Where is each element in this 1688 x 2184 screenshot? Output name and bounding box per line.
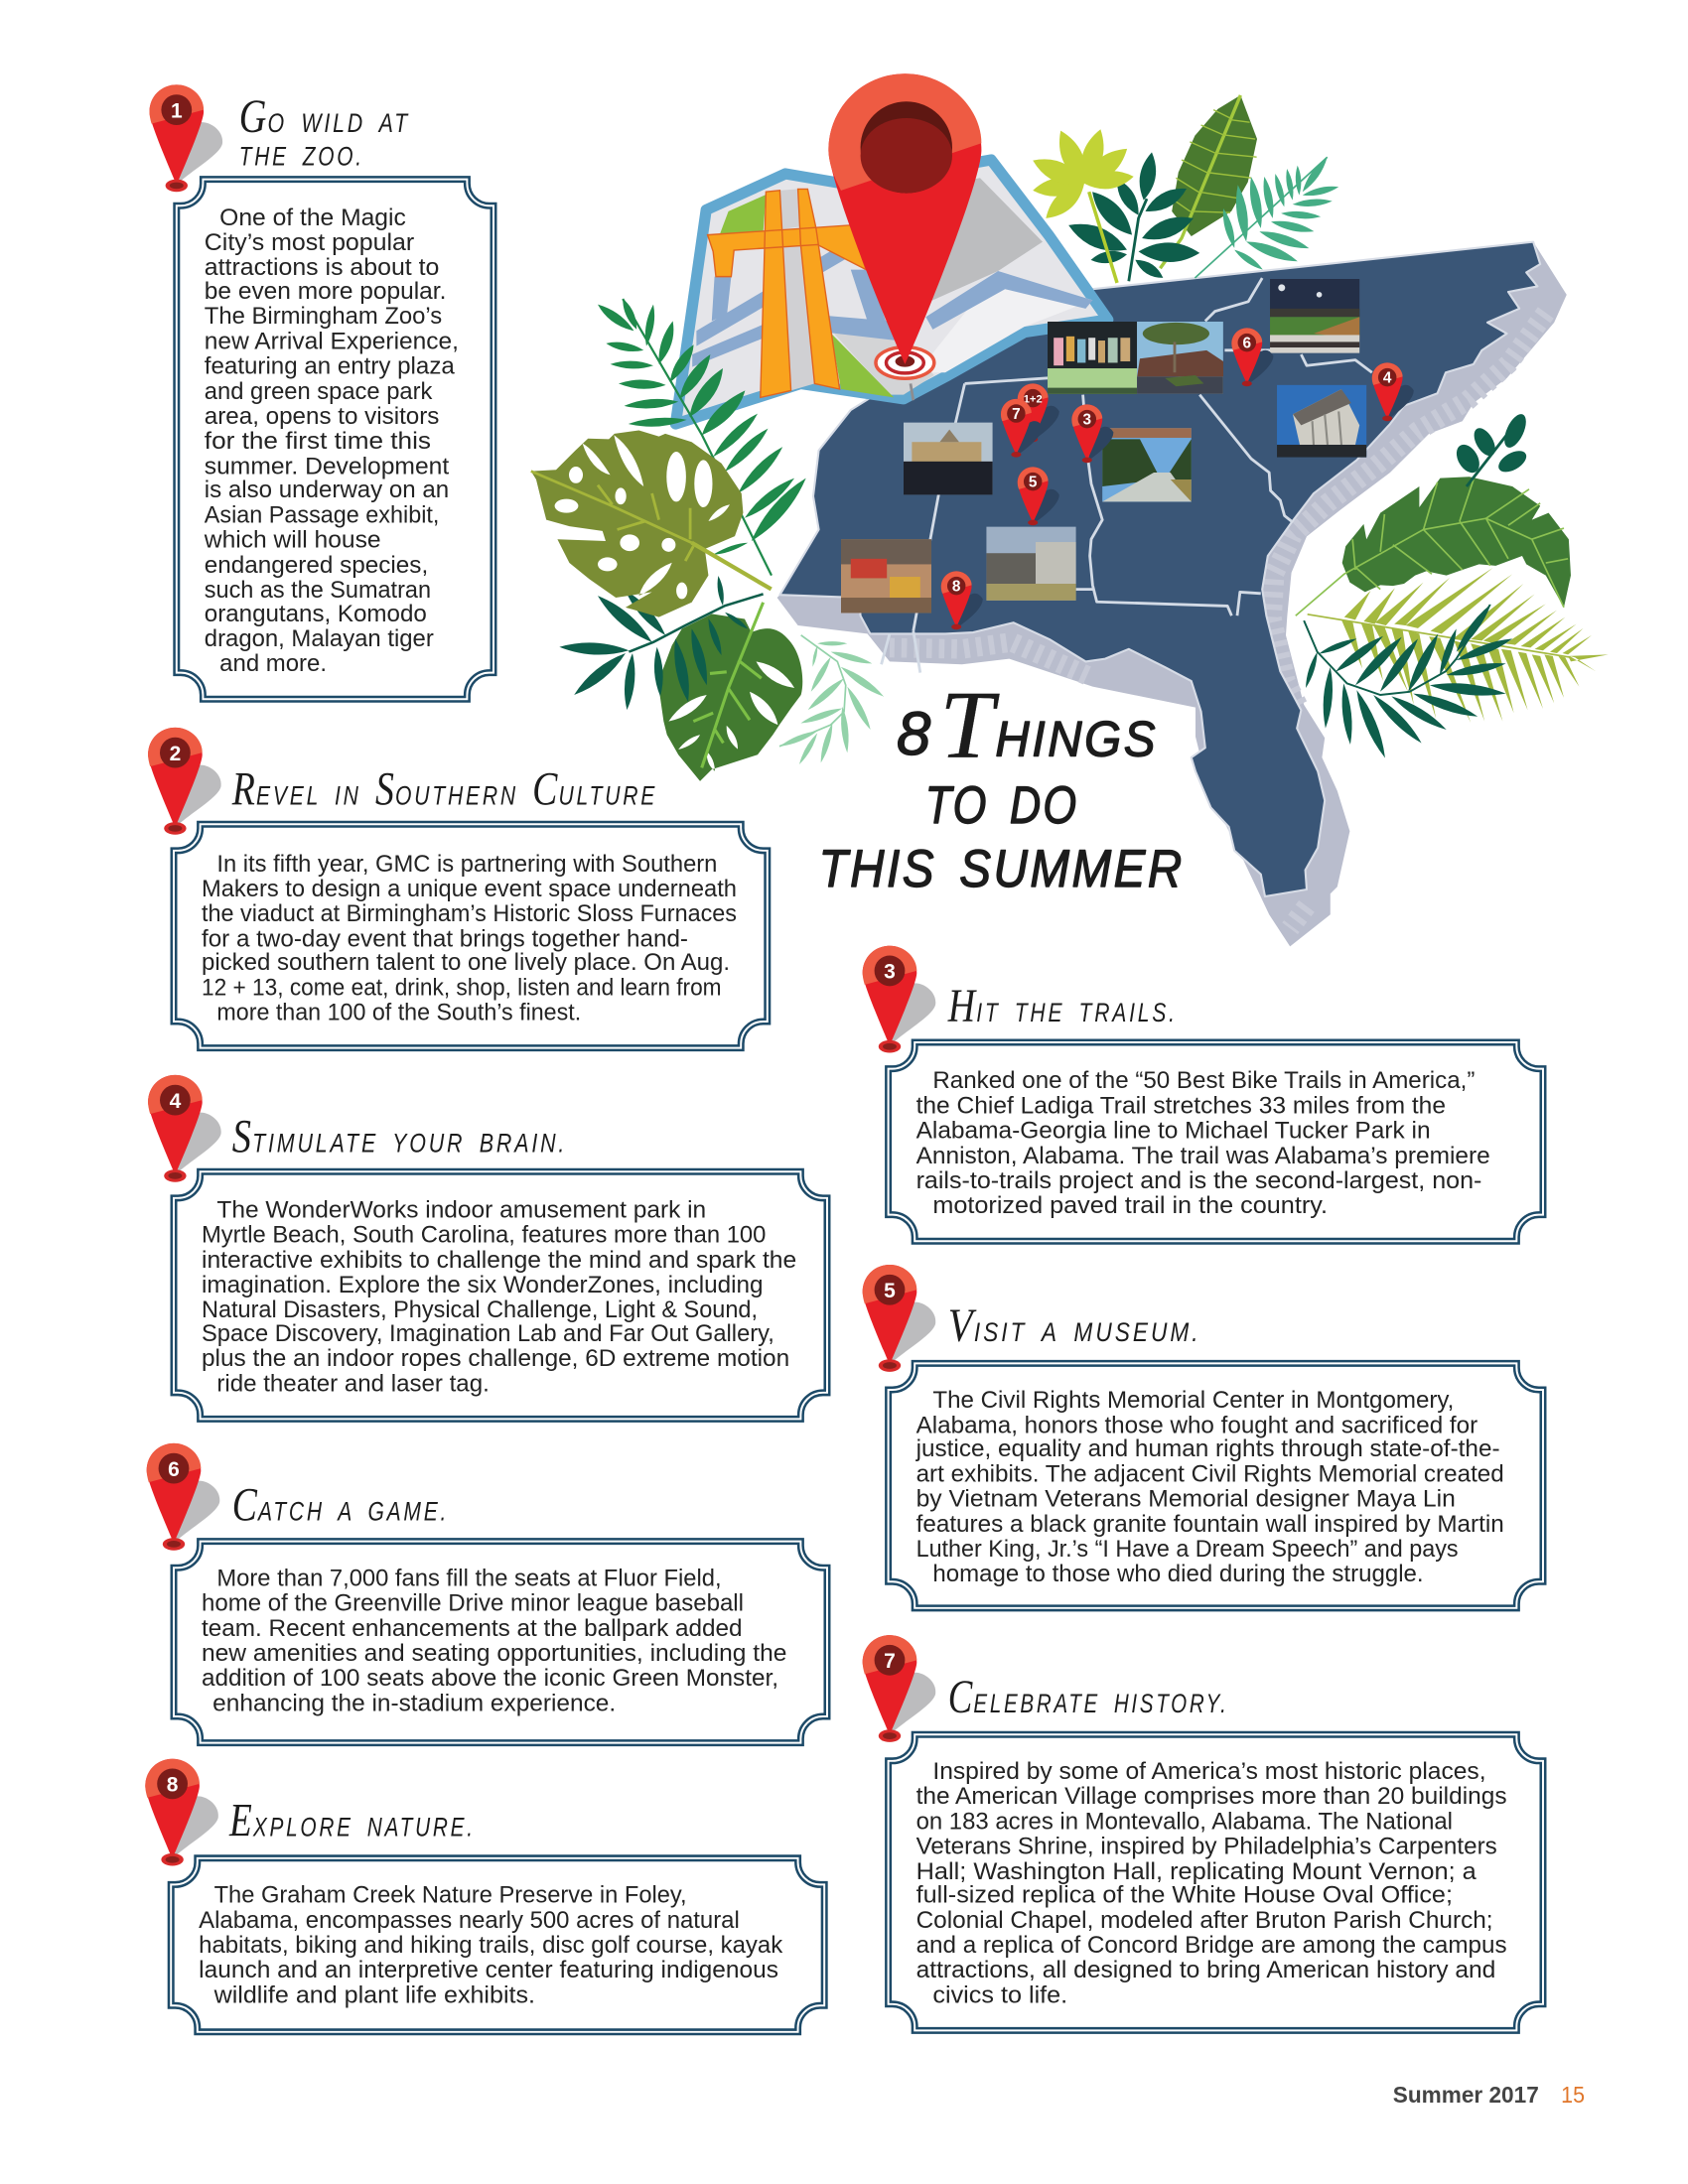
pin 5 [863, 1265, 935, 1372]
pin 3: 3 [884, 961, 896, 984]
large location pin [828, 73, 981, 378]
fern: teal [1195, 155, 1339, 278]
sprig: dark [1452, 411, 1530, 486]
body 2: 12 + 13, come eat, drink, shop, listen and learn from [202, 974, 722, 1001]
body 2: more than 100 of the South’s finest. [216, 1000, 581, 1026]
body 1: dragon, Malayan tiger [205, 625, 434, 652]
body 1: is also underway on an [205, 477, 449, 503]
body 4: ride theater and laser tag. [216, 1370, 490, 1397]
road to target [911, 383, 914, 400]
body 1: One of the Magic [219, 205, 406, 231]
body 8: launch and an interpretive center featuring indigenous [199, 1957, 778, 1983]
grey lower patch [834, 328, 934, 395]
body 6: addition of 100 seats above the iconic Green Monster, [202, 1665, 778, 1692]
pin 3 [1071, 404, 1113, 463]
pin 7: 7 [884, 1650, 896, 1673]
frame 2 [174, 824, 768, 1048]
body 1: new Arrival Experience, [205, 328, 459, 354]
body 1: which will house [204, 527, 381, 554]
heading 8: EXPLORE NATURE. [228, 1795, 476, 1846]
title line 1 rest: HINGS [995, 711, 1158, 767]
photo: museum [986, 527, 1076, 601]
photo: WonderWorks [1277, 385, 1366, 458]
body 4 [202, 1196, 796, 1397]
body 7 [916, 1758, 1507, 2008]
body 1: and more. [219, 650, 327, 677]
body 7: on 183 acres in Montevallo, Alabama. The National [916, 1808, 1453, 1835]
photo: ballpark [1270, 279, 1359, 353]
body 7: full-sized replica of the White House Oval Office; [916, 1882, 1453, 1909]
map pins [941, 328, 1414, 629]
photo: Southern Makers [1048, 322, 1137, 394]
body 5: by Vietnam Veterans Memorial designer Maya Lin [916, 1486, 1456, 1513]
pin 1+2 [1018, 383, 1059, 442]
fern: dark teal [559, 576, 764, 711]
fern: mint [778, 635, 886, 765]
frame 5 [889, 1363, 1543, 1608]
body 7: and a replica of Concord Bridge are among the campus [916, 1932, 1507, 1959]
left foliage [531, 299, 886, 781]
fern: green [598, 299, 811, 576]
pin 3: 3 [1083, 412, 1091, 429]
pin 8 [145, 1759, 218, 1866]
body 5: Alabama, honors those who fought and sacrificed for [916, 1412, 1477, 1438]
compound leaf: dark [1064, 151, 1199, 282]
body 1: attractions is about to [205, 254, 439, 281]
body 2: In its fifth year, GMC is partnering with Southern [216, 851, 717, 878]
body 3: Ranked one of the “50 Best Bike Trails in America,” [932, 1067, 1475, 1094]
photo: trail [1102, 428, 1192, 501]
map: state borders [882, 278, 1372, 673]
top foliage [1029, 95, 1339, 283]
body 1: area, opens to visitors [205, 403, 439, 430]
right foliage [1296, 411, 1609, 759]
body 2: Makers to design a unique event space underneath [202, 876, 737, 902]
frame 4 [174, 1171, 827, 1419]
body 4: interactive exhibits to challenge the mind and spark the [202, 1247, 796, 1274]
body 1: for the first time this [205, 428, 431, 455]
frame 6 [174, 1542, 827, 1743]
body 1: and green space park [205, 378, 433, 405]
frame 8 [171, 1858, 824, 2032]
body 5: features a black granite fountain wall inspired by Martin [916, 1511, 1504, 1538]
body 2: the viaduct at Birmingham’s Historic Sloss Furnaces [202, 900, 737, 927]
body 2: picked southern talent to one lively place. On Aug. [202, 949, 730, 976]
grey block [890, 178, 1043, 306]
leaf: yellow star [1029, 126, 1135, 283]
photo: American Village [904, 423, 993, 494]
photo: zoo interior [841, 539, 931, 613]
body 2 [202, 851, 737, 1026]
heading 6: CATCH A GAME. [232, 1480, 449, 1532]
body 7: Veterans Shrine, inspired by Philadelphia’s Carpenters [916, 1834, 1497, 1860]
heading 1: THE ZOO. [239, 142, 364, 172]
pin 8 [941, 571, 983, 629]
body 8 [199, 1882, 782, 2008]
title line 1 script T: T [939, 672, 1000, 779]
body 3: the Chief Ladiga Trail stretches 33 miles from the [916, 1092, 1446, 1119]
pin 6: 6 [1243, 336, 1251, 352]
title line 3: THIS SUMMER [819, 840, 1185, 898]
panel 1: zoo [149, 84, 493, 699]
fern: light green [1308, 568, 1609, 723]
body 5: homage to those who died during the struggle. [932, 1561, 1424, 1587]
body 2: for a two-day event that brings together hand- [202, 925, 688, 952]
body 1 [204, 205, 459, 677]
map: southeast states [779, 242, 1540, 896]
heading 7: CELEBRATE HISTORY. [948, 1672, 1229, 1723]
pin 4 [1372, 362, 1414, 421]
body 1: be even more popular. [205, 278, 446, 305]
monstera: olive [531, 430, 772, 617]
body 4: imagination. Explore the six WonderZones, including [202, 1272, 764, 1298]
body 4: Myrtle Beach, South Carolina, features more than 100 [202, 1222, 766, 1249]
body 5: The Civil Rights Memorial Center in Montgomery, [932, 1387, 1454, 1414]
street map with fold [675, 160, 1108, 424]
body 7: civics to life. [932, 1981, 1067, 2008]
body 7: Hall; Washington Hall, replicating Mount Vernon; a [916, 1858, 1477, 1885]
green parks [720, 195, 894, 397]
body 8: habitats, biking and hiking trails, disc golf course, kayak [199, 1932, 782, 1959]
pin 1+2: 1+2 [1024, 393, 1043, 405]
body 5: Luther King, Jr.’s “I Have a Dream Speech” and pays [916, 1536, 1459, 1563]
big leaf: green [1296, 477, 1571, 615]
body 7: attractions, all designed to bring American history and [916, 1957, 1495, 1983]
pin 8: 8 [952, 579, 961, 596]
pin 5 [1018, 467, 1059, 525]
panel 5: museum [863, 1265, 1543, 1608]
pin 2: 2 [170, 743, 181, 765]
heading 2: REVEL IN SOUTHERN CULTURE [231, 764, 657, 816]
pin 5: 5 [1029, 475, 1038, 491]
heading 5: VISIT A MUSEUM. [948, 1300, 1201, 1352]
pin 8: 8 [167, 1774, 179, 1797]
panel 7: history [863, 1635, 1543, 2030]
photo: school building [1137, 322, 1223, 394]
body 8: wildlife and plant life exhibits. [213, 1981, 535, 2008]
street map sheet [675, 160, 1108, 424]
title line 2: TO DO [925, 776, 1078, 835]
panel 2: southern culture [148, 728, 768, 1048]
pin 6: 6 [168, 1458, 180, 1481]
silver street stripes [779, 189, 814, 390]
body 3: Anniston, Alabama. The trail was Alabama’s premiere [916, 1143, 1490, 1169]
frame 1 [177, 180, 493, 699]
body 6: team. Recent enhancements at the ballpark added [202, 1615, 743, 1642]
body 3: motorized paved trail in the country. [932, 1192, 1328, 1219]
frame 3 [889, 1042, 1543, 1241]
pin 6 [1231, 328, 1273, 386]
olive monstera ribs [531, 472, 693, 561]
body 6: new amenities and seating opportunities, including the [202, 1640, 786, 1667]
frame 7 [889, 1734, 1543, 2030]
body 5 [915, 1387, 1504, 1587]
title line 1 numeral: 8 [897, 700, 933, 768]
pin 4: 4 [170, 1090, 182, 1113]
body 7: Inspired by some of America’s most historic places, [932, 1758, 1486, 1785]
body 1: summer. Development [205, 453, 450, 479]
monstera: dark green [659, 603, 802, 781]
footer: Summer 2017 [1393, 2082, 1539, 2108]
body 3 [916, 1067, 1490, 1219]
body 8: The Graham Creek Nature Preserve in Foley, [214, 1882, 687, 1909]
body 7: the American Village comprises more than 20 buildings [916, 1783, 1507, 1810]
body 4: The WonderWorks indoor amusement park in [216, 1196, 706, 1223]
title [819, 672, 1185, 898]
body 3: Alabama-Georgia line to Michael Tucker Park in [916, 1118, 1431, 1145]
panel 8: nature [145, 1759, 824, 2032]
body 1: orangutans, Komodo [205, 601, 427, 627]
pin 6 [147, 1443, 219, 1551]
body 6: enhancing the in-stadium experience. [212, 1690, 616, 1716]
pin 4 [148, 1075, 221, 1182]
leaf: banana [1160, 95, 1257, 268]
map illustration [777, 242, 1567, 946]
body 1: such as the Sumatran [205, 577, 431, 604]
body 1: The Birmingham Zoo’s [205, 303, 442, 330]
pin 1: 1 [171, 99, 183, 122]
body 1: City’s most popular [205, 229, 414, 256]
pin 7 [1001, 399, 1043, 458]
white fold facet [917, 271, 1092, 372]
panel 6: game [147, 1443, 827, 1743]
body 6: home of the Greenville Drive minor league baseball [202, 1590, 744, 1617]
body 4: Space Discovery, Imagination Lab and Far Out Gallery, [202, 1320, 774, 1347]
pin 4: 4 [1383, 370, 1392, 387]
orange roads [708, 189, 866, 397]
panel 3: trails [863, 946, 1543, 1241]
heading 1: GO WILD AT [239, 91, 410, 143]
body 7: Colonial Chapel, modeled after Bruton Parish Church; [916, 1907, 1493, 1934]
olive monstera stem [692, 543, 772, 589]
monstera ribs [693, 603, 764, 767]
pin 5: 5 [884, 1280, 896, 1302]
fern: dark teal [1303, 602, 1514, 759]
body 8: Alabama, encompasses nearly 500 acres of natural [199, 1907, 740, 1934]
map: wall ribs [890, 313, 1546, 928]
body 5: justice, equality and human rights through state-of-the- [915, 1435, 1500, 1462]
body 4: Natural Disasters, Physical Challenge, Light & Sound, [202, 1297, 758, 1323]
pin 7: 7 [1012, 406, 1021, 423]
footer: 15 [1561, 2082, 1585, 2108]
body 3: rails-to-trails project and is the second-largest, non- [916, 1167, 1481, 1194]
body 5: art exhibits. The adjacent Civil Rights Memorial created [916, 1460, 1504, 1487]
pin 3 [863, 946, 935, 1053]
body 6 [202, 1565, 786, 1716]
heading 4: STIMULATE YOUR BRAIN. [232, 1112, 567, 1163]
body 1: endangered species, [205, 552, 428, 579]
body 4: plus the an indoor ropes challenge, 6D extreme motion [202, 1345, 789, 1372]
body 1: featuring an entry plaza [205, 353, 456, 380]
pin 7 [863, 1635, 935, 1742]
panel 4: brain [148, 1075, 827, 1419]
blue roads [692, 243, 1092, 367]
body 6: More than 7,000 fans fill the seats at Fluor Field, [216, 1565, 722, 1591]
map: coastal wall [777, 242, 1567, 946]
pin 1 [149, 84, 222, 192]
pin 2 [148, 728, 221, 835]
body 1: Asian Passage exhibit, [205, 501, 439, 528]
heading 1 [239, 91, 410, 172]
heading 3: HIT THE TRAILS. [947, 981, 1178, 1032]
